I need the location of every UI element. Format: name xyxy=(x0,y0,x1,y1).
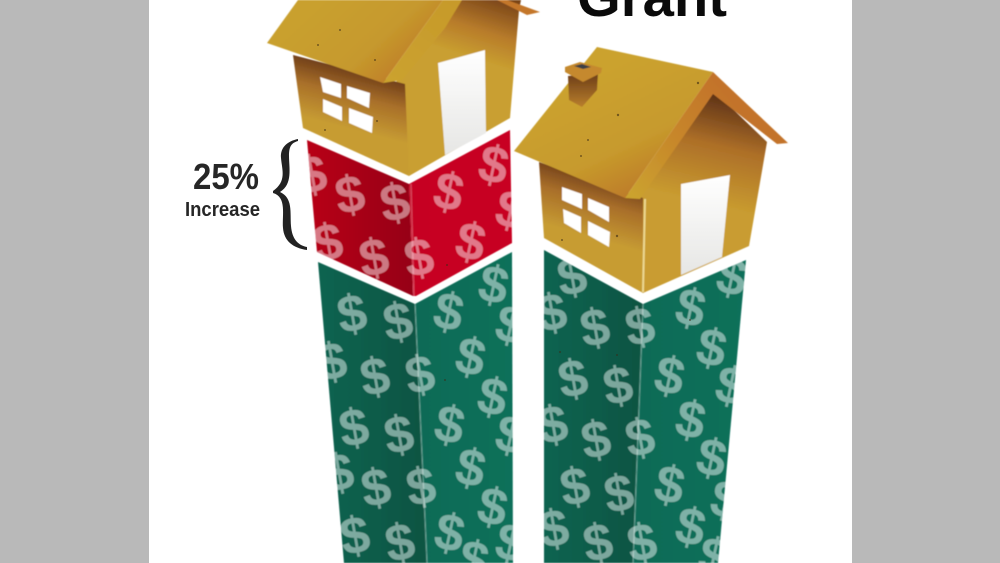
left house: roof edge xyxy=(383,0,462,83)
dollar pattern: red right face: $ xyxy=(428,161,469,224)
dollar pattern: right tower left face xyxy=(543,260,644,563)
curly brace marking the increase xyxy=(273,139,307,250)
dollar pattern: red left face: $ xyxy=(331,164,369,226)
dollar pattern: right tower left face: $ xyxy=(554,348,592,410)
dollar pattern: right tower left face: $ xyxy=(621,296,659,358)
dollar pattern: left tower right face: $ xyxy=(401,344,439,406)
right house: door xyxy=(681,175,730,275)
dollar pattern: right tower right face: $ xyxy=(649,345,690,408)
dollar pattern: right tower right face: $ xyxy=(670,496,711,559)
dollar pattern: red right face: $ xyxy=(400,227,438,289)
dollar pattern: right tower right face: $ xyxy=(649,454,690,517)
right tower: green money column xyxy=(533,246,752,563)
right house: window xyxy=(562,187,610,247)
dollar pattern: left tower right face: $ xyxy=(473,254,514,317)
dollar pattern: left tower right face: $ xyxy=(429,394,470,457)
dollar pattern: right tower right face: $ xyxy=(711,246,752,309)
white page panel xyxy=(149,0,852,563)
dollar pattern: right tower left face: $ xyxy=(535,498,573,560)
dollar pattern: left tower right face: $ xyxy=(490,404,531,467)
dollar pattern: left tower left face: $ xyxy=(333,283,371,345)
dollar pattern: right tower right face: $ xyxy=(621,407,659,469)
dollar pattern: right tower left face: $ xyxy=(577,409,615,471)
dollar pattern: red left face: $ xyxy=(376,172,414,234)
dollar pattern: left tower right face: $ xyxy=(428,281,469,344)
right house: wall corner highlight xyxy=(643,199,645,292)
dollar pattern: red right face: $ xyxy=(450,211,491,274)
label: 25% Increase xyxy=(185,156,260,221)
dollar pattern: red left face: $ xyxy=(309,212,347,274)
right house: left wall xyxy=(539,162,643,293)
dollar pattern: right tower left face: $ xyxy=(599,355,637,417)
dollar pattern: right tower right face: $ xyxy=(691,317,732,380)
dollar pattern: left tower right face: $ xyxy=(429,502,470,563)
dollar pattern: left tower left face: $ xyxy=(380,404,418,466)
dollar pattern: left tower right face: $ xyxy=(450,326,491,389)
left house: roof xyxy=(267,0,443,83)
dollar pattern: right tower left face: $ xyxy=(600,463,638,525)
right house xyxy=(514,47,788,293)
dollar pattern: left tower left face: $ xyxy=(401,344,439,406)
dollar pattern: left tower left face xyxy=(324,292,425,563)
dollar pattern: right tower left face: $ xyxy=(553,246,591,308)
paper speckle xyxy=(317,29,699,381)
right house: roof xyxy=(514,47,713,198)
dollar pattern: red right face: $ xyxy=(473,134,514,197)
left house: door xyxy=(438,50,486,155)
dollar pattern: red right face: $ xyxy=(376,172,414,234)
dollar pattern: left tower left face: $ xyxy=(320,442,358,504)
dollar pattern: left tower right face: $ xyxy=(472,476,513,539)
dollar pattern: right tower right face: $ xyxy=(670,277,711,340)
dollar pattern: left tower right face: $ xyxy=(450,437,491,500)
dollar pattern: left tower right face: $ xyxy=(472,366,513,429)
dollar pattern: left tower right face xyxy=(417,263,514,563)
left house: left wall xyxy=(293,55,409,176)
dollar pattern: red right face xyxy=(410,143,512,280)
dollar pattern: right tower right face: $ xyxy=(670,389,711,452)
left house: roof right tip xyxy=(497,0,540,15)
left house: right wall xyxy=(395,0,521,176)
dollar pattern: red left face: $ xyxy=(293,144,331,206)
right house: chimney xyxy=(565,62,602,107)
dollar pattern: right tower right face: $ xyxy=(710,355,751,418)
dollar pattern: left tower left face: $ xyxy=(379,291,417,353)
dollar pattern: red left face xyxy=(308,153,412,280)
left house xyxy=(267,0,540,176)
label: 25% Increase: 25% xyxy=(193,156,259,197)
dollar pattern: right tower right face xyxy=(632,261,746,563)
dollar pattern: right tower right face: $ xyxy=(705,469,746,532)
dollar pattern: left tower left face: $ xyxy=(357,457,395,519)
dollar pattern: right tower left face: $ xyxy=(534,394,572,456)
dollar pattern: left tower left face: $ xyxy=(402,456,440,518)
dollar pattern: right tower right face: $ xyxy=(691,427,732,490)
dollar pattern: left tower left face: $ xyxy=(356,346,394,408)
left house: window xyxy=(320,77,373,133)
dollar pattern: right tower left face: $ xyxy=(533,282,571,344)
label: 25% Increase: Increase xyxy=(185,199,260,221)
dollar pattern: left tower left face: $ xyxy=(313,331,351,393)
dollar pattern: left tower left face: $ xyxy=(335,397,373,459)
dollar pattern: left tower right face: $ xyxy=(490,294,531,357)
dollar pattern: right tower left face: $ xyxy=(556,456,594,518)
dollar pattern: red left face: $ xyxy=(355,227,393,289)
dollar pattern: red right face: $ xyxy=(490,179,531,242)
dollar pattern: right tower right face: $ xyxy=(621,296,659,358)
dollar pattern: left tower right face: $ xyxy=(402,456,440,518)
right house: right wall xyxy=(638,90,767,293)
left tower: red 25% increase block xyxy=(306,130,513,297)
dollar pattern: red left face: $ xyxy=(400,227,438,289)
right house: roof edge xyxy=(625,72,788,199)
dollar pattern: right tower left face: $ xyxy=(576,297,614,359)
dollar pattern: right tower left face: $ xyxy=(621,407,659,469)
left tower: green money column xyxy=(313,252,531,563)
